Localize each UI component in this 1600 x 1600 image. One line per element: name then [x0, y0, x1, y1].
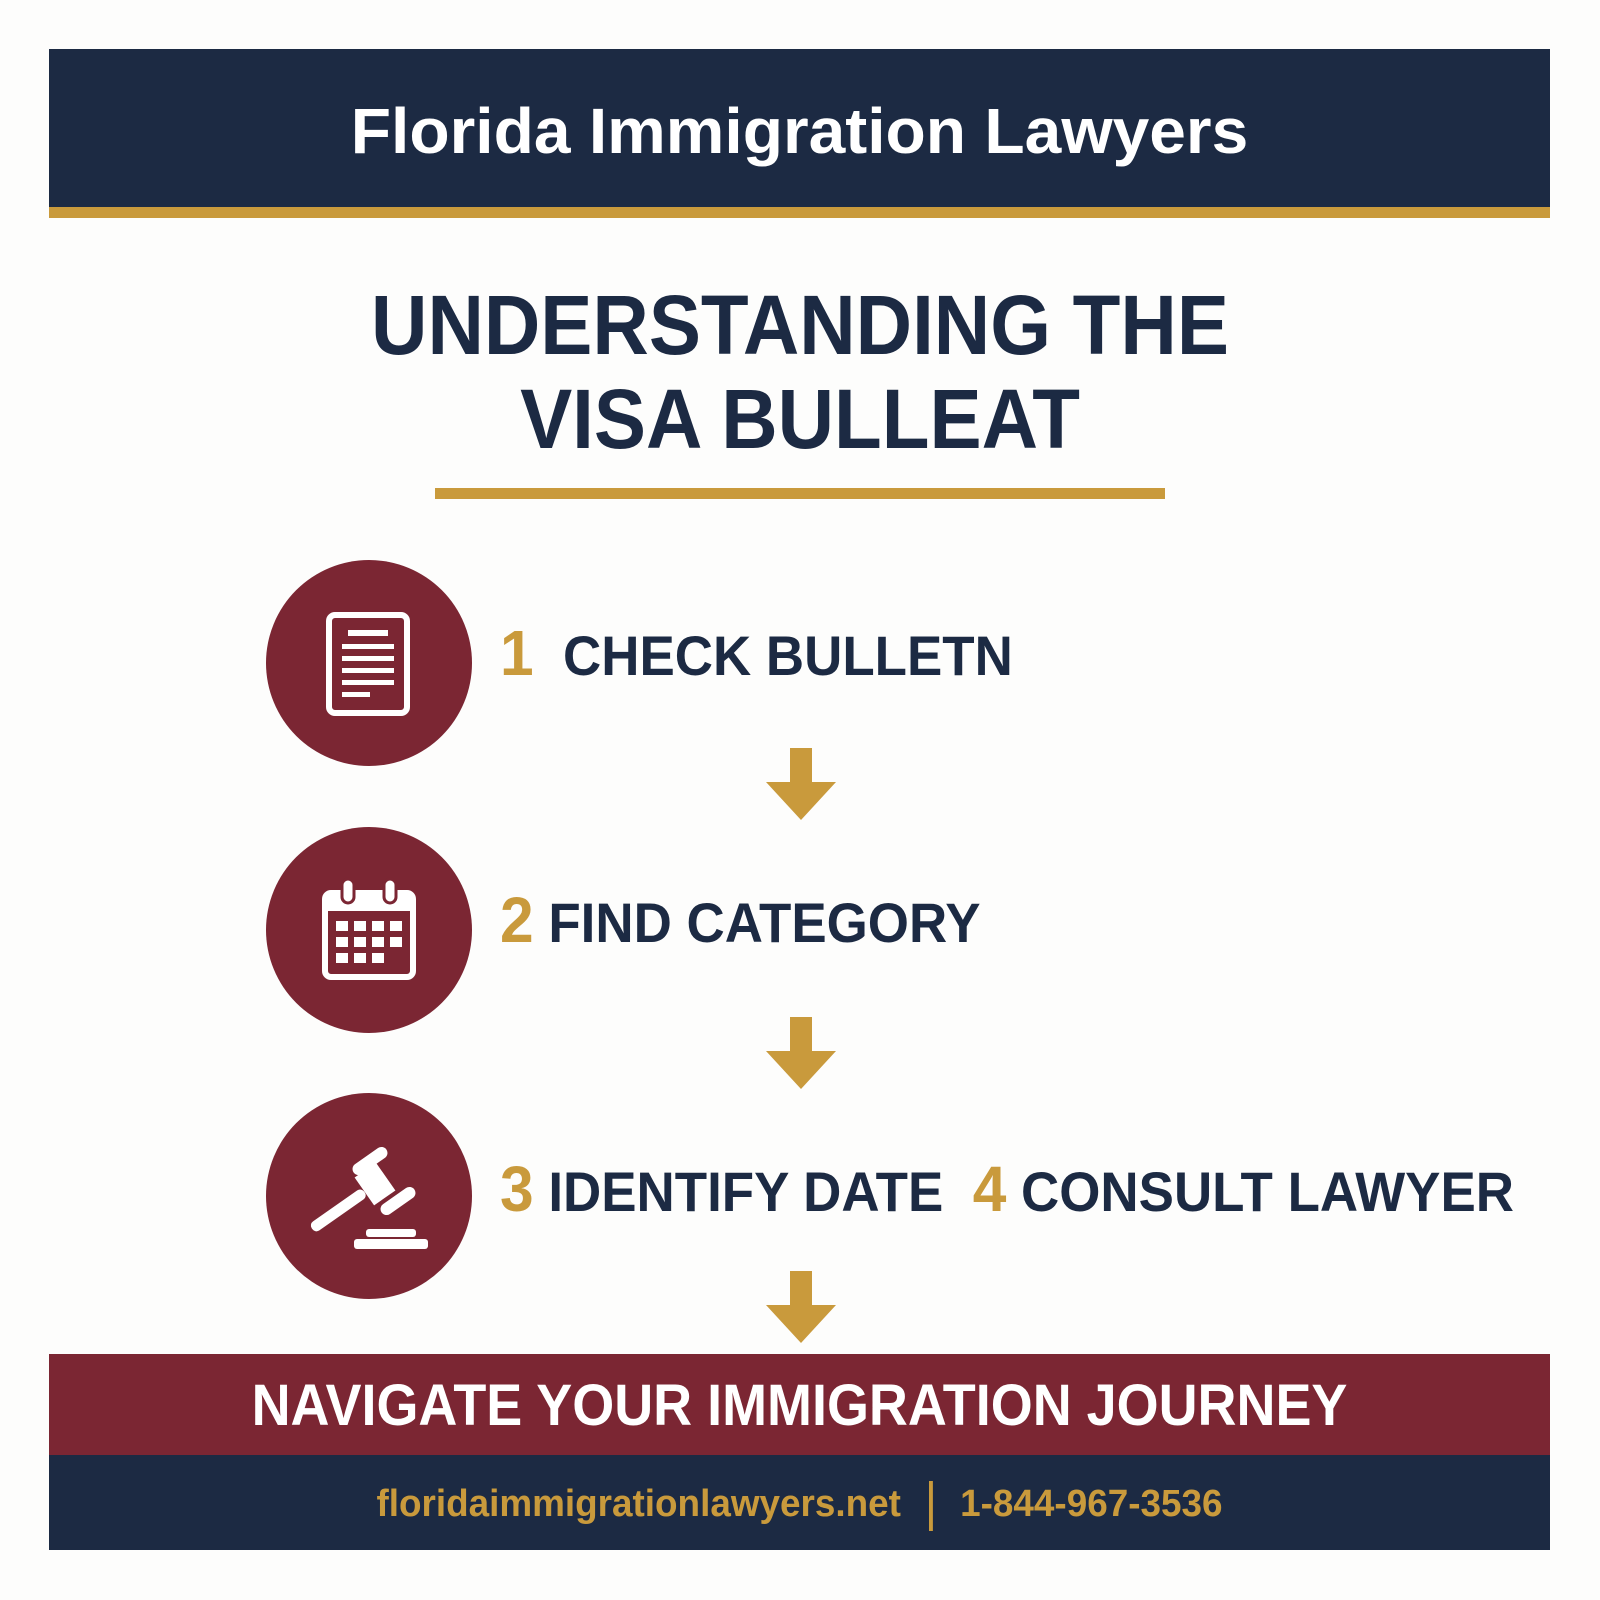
main title [371, 278, 1229, 466]
label 1: 1 CHECK BULLETN [500, 617, 1013, 689]
footer contact bar [49, 1455, 1550, 1550]
icon: document [266, 560, 472, 766]
arrow 2 [766, 1017, 836, 1089]
step 2 [266, 827, 981, 1033]
main title: VISA BULLEAT [520, 372, 1080, 466]
contact text: floridaimmigrationlawyers.net 1-844-967-3536 [377, 1483, 1222, 1525]
header bar [49, 49, 1550, 218]
main title: UNDERSTANDING THE [371, 278, 1229, 372]
step 1 [266, 560, 1013, 766]
icon: calendar [266, 827, 472, 1033]
icon: gavel [266, 1093, 472, 1299]
banner: call to action [49, 1354, 1550, 1455]
banner text: NAVIGATE YOUR IMMIGRATION JOURNEY [252, 1373, 1347, 1438]
arrow 3 [766, 1271, 836, 1343]
step 3 and 4 [266, 1093, 1514, 1299]
title underline [435, 488, 1165, 499]
header title: Florida Immigration Lawyers [351, 95, 1248, 167]
label 2: 2 FIND CATEGORY [500, 884, 981, 956]
label 3: 3 IDENTIFY DATE 4 CONSULT LAWYER [500, 1153, 1514, 1225]
arrow 1 [766, 748, 836, 820]
